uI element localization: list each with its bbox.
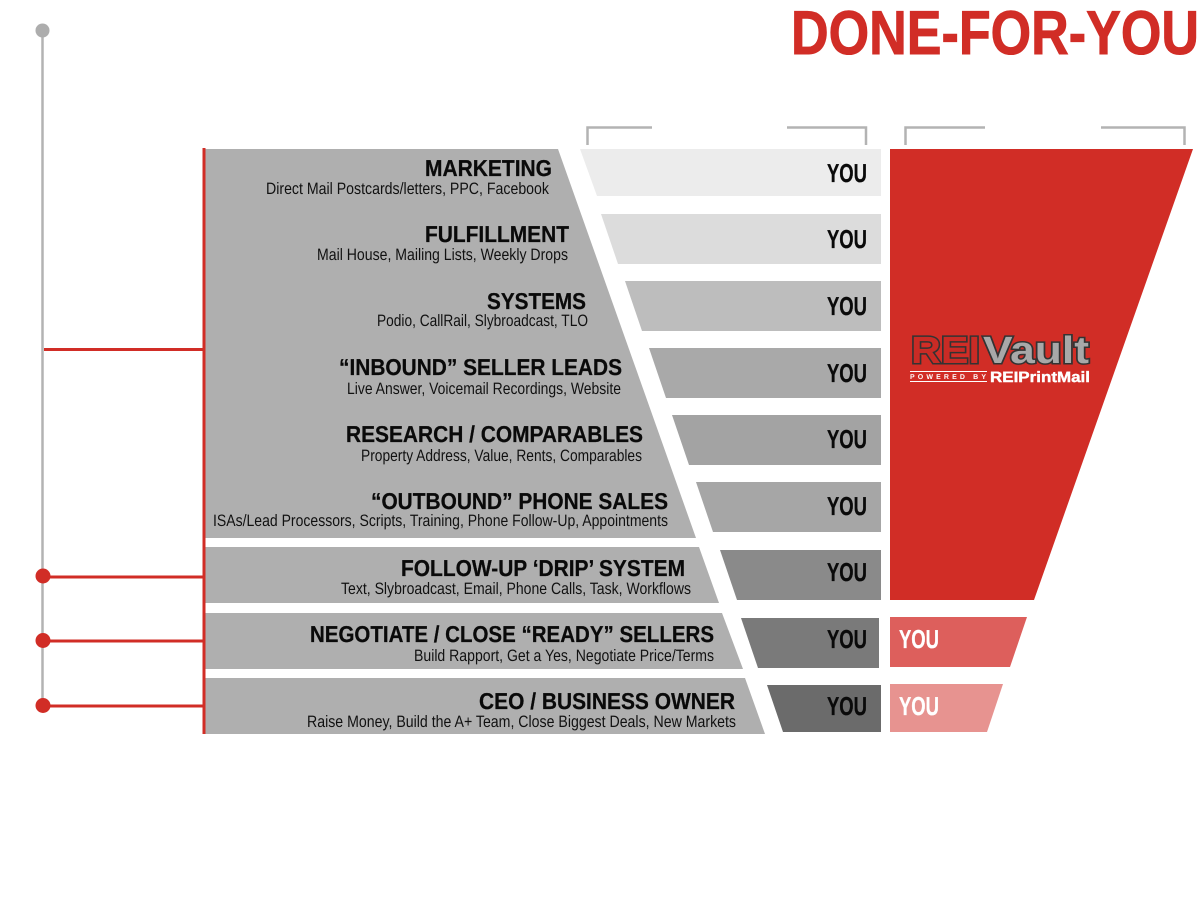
panel: tasks top block: SYSTEMS: [487, 288, 586, 314]
before column: you funnel: YOU: [827, 291, 867, 321]
before column: you funnel: YOU: [827, 224, 867, 254]
panel: tasks top block: Mail House, Mailing Lists, Weekly Drops: [317, 246, 568, 264]
panel: tasks top block: Property Address, Value, Rents, Comparables: [361, 447, 642, 465]
before column: you funnel: YOU: [827, 158, 867, 188]
bracket: after: [906, 128, 1184, 145]
panel: follow-up drip system: Text, Slybroadcast, Email, Phone Calls, Task, Workflows: [341, 580, 691, 598]
before column: you funnel: [580, 149, 881, 732]
panel: tasks top block: FULFILLMENT: [425, 221, 569, 247]
before column: you funnel: YOU: [827, 358, 867, 388]
panel: tasks top block: [206, 149, 696, 538]
panel: follow-up drip system: FOLLOW-UP ‘DRIP’ SYSTEM: [401, 555, 685, 581]
panel: ceo business owner: [206, 678, 765, 734]
timeline axis: [36, 24, 50, 706]
panel: tasks top block: “INBOUND” SELLER LEADS: [339, 354, 622, 380]
after column: red done-for-you block: [890, 149, 1193, 600]
panel: ceo business owner: CEO / BUSINESS OWNER: [479, 688, 735, 714]
logo: REIVault: Vault: [983, 330, 1089, 372]
panel: negotiate and close: NEGOTIATE / CLOSE “READY” SELLERS: [310, 621, 714, 647]
panel: ceo business owner: Raise Money, Build the A+ Team, Close Biggest Deals, New Markets: [307, 713, 736, 731]
panel: tasks top block: Direct Mail Postcards/letters, PPC, Facebook: [266, 180, 550, 198]
panel: tasks top block: Live Answer, Voicemail Recordings, Website: [347, 380, 621, 398]
after row: negotiate you: YOU: [899, 624, 939, 654]
before column: you funnel: YOU: [827, 624, 867, 654]
panel: tasks top block: Podio, CallRail, Slybroadcast, TLO: [377, 312, 588, 330]
before column: you funnel: YOU: [827, 491, 867, 521]
before column: you funnel: YOU: [827, 424, 867, 454]
panel: negotiate and close: [206, 613, 743, 669]
after row: ceo you: [890, 684, 1003, 732]
before column: you funnel: YOU: [827, 557, 867, 587]
panel: tasks top block: “OUTBOUND” PHONE SALES: [371, 488, 668, 514]
logo: REIVault: REIPrintMail: [990, 369, 1090, 386]
before column: you funnel: YOU: [827, 691, 867, 721]
panel: tasks top block: MARKETING: [425, 155, 552, 181]
panel: negotiate and close: Build Rapport, Get a Yes, Negotiate Price/Terms: [414, 647, 714, 665]
panel: follow-up drip system: [206, 547, 719, 603]
logo: REIVault: REI: [911, 330, 980, 372]
after row: ceo you: YOU: [899, 691, 939, 721]
panel: tasks top block: RESEARCH / COMPARABLES: [346, 421, 643, 447]
timeline connectors: [36, 148, 206, 734]
bracket: before: [588, 128, 866, 145]
logo: REIVault: POWERED BY: [910, 374, 986, 381]
panel: tasks top block: ISAs/Lead Processors, Scripts, Training, Phone Follow-Up, Appointments: [213, 512, 668, 530]
logo: REIVault: [910, 330, 1090, 386]
after row: negotiate you: [890, 617, 1027, 667]
